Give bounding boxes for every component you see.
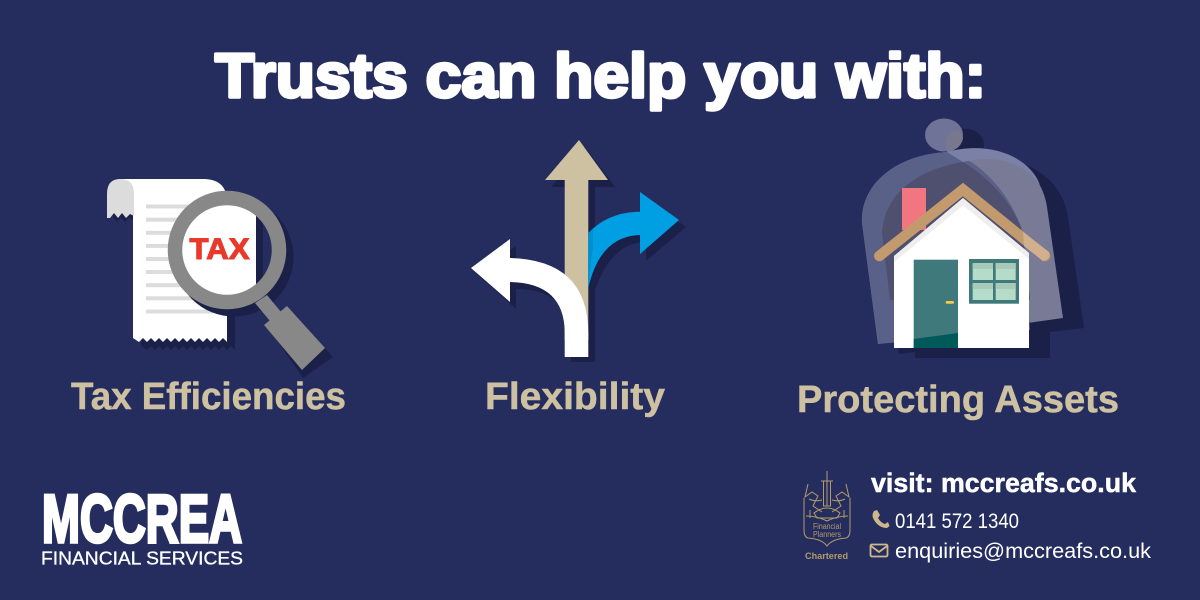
roof highlight end (1023, 232, 1049, 261)
white left arrow (471, 239, 588, 357)
icon: envelope (870, 544, 888, 556)
icon: house under glass dome (862, 118, 1084, 358)
helmet and book (806, 508, 848, 521)
label: tax efficiencies: Tax Efficiencies (71, 376, 346, 418)
shield outline (804, 498, 850, 546)
dome body right (862, 149, 1063, 344)
icon: three direction arrows (471, 140, 686, 362)
title: Trusts can help you with: (215, 42, 986, 111)
straight tan arrow (545, 140, 608, 340)
window panes (973, 263, 1016, 300)
magnifier ring (175, 198, 279, 302)
crest wording (805, 522, 848, 562)
magnifier handle (264, 306, 325, 370)
window frame (969, 259, 1019, 304)
logo: McCrea Financial Services (41, 481, 243, 568)
icon: phone (872, 510, 890, 528)
pane shading (973, 263, 1016, 289)
sword (821, 471, 833, 506)
under-roof band (894, 198, 1029, 262)
contact: website: visit: mccreafs.co.uk (871, 468, 1137, 498)
logo subtitle: FINANCIAL SERVICES (41, 548, 243, 568)
crest wording: Chartered (805, 551, 848, 562)
dome left band (862, 152, 1030, 344)
dome top highlight (947, 148, 1040, 185)
label: flexibility: Flexibility (485, 376, 665, 418)
blue right arrow (588, 192, 679, 288)
arrow shadows (478, 147, 686, 362)
door handle (946, 301, 954, 304)
handle shadow (271, 313, 333, 378)
blue arrow fold (588, 229, 593, 288)
chimney (902, 188, 926, 230)
icon: tax receipt under magnifying glass (107, 179, 333, 378)
contact: email: enquiries@mccreafs.co.uk (895, 540, 1152, 563)
logo wordmark: MCCREA (42, 481, 242, 557)
dome inner shadow (882, 162, 1030, 300)
paper shadow in lens (256, 216, 263, 284)
door (914, 260, 958, 348)
contact: phone number: 0141 572 1340 (895, 510, 1019, 533)
receipt shadow (141, 222, 235, 350)
receipt paper (120, 179, 227, 342)
lens interior (181, 204, 273, 296)
door shadow (914, 333, 958, 348)
crest wording: Planners (813, 530, 841, 539)
crest: Chartered Financial Planners (804, 471, 850, 562)
tax label: TAX (190, 233, 250, 266)
knob overlap (946, 129, 963, 152)
magnifier neck (255, 295, 281, 321)
lens shadow (182, 205, 286, 309)
tan arrow fold shadow (565, 274, 588, 340)
roof (879, 190, 1045, 256)
dome knob (925, 118, 963, 152)
receipt curl (107, 179, 134, 218)
knob shadow (946, 128, 984, 162)
label: protecting assets: Protecting Assets (797, 379, 1119, 421)
paper in lens (182, 205, 256, 295)
house body (894, 198, 1029, 348)
crest wording: Financial (813, 522, 841, 531)
receipt text lines (146, 204, 216, 314)
dome shadow (883, 159, 1084, 358)
supporters (805, 484, 849, 512)
curl shadow (113, 214, 133, 222)
